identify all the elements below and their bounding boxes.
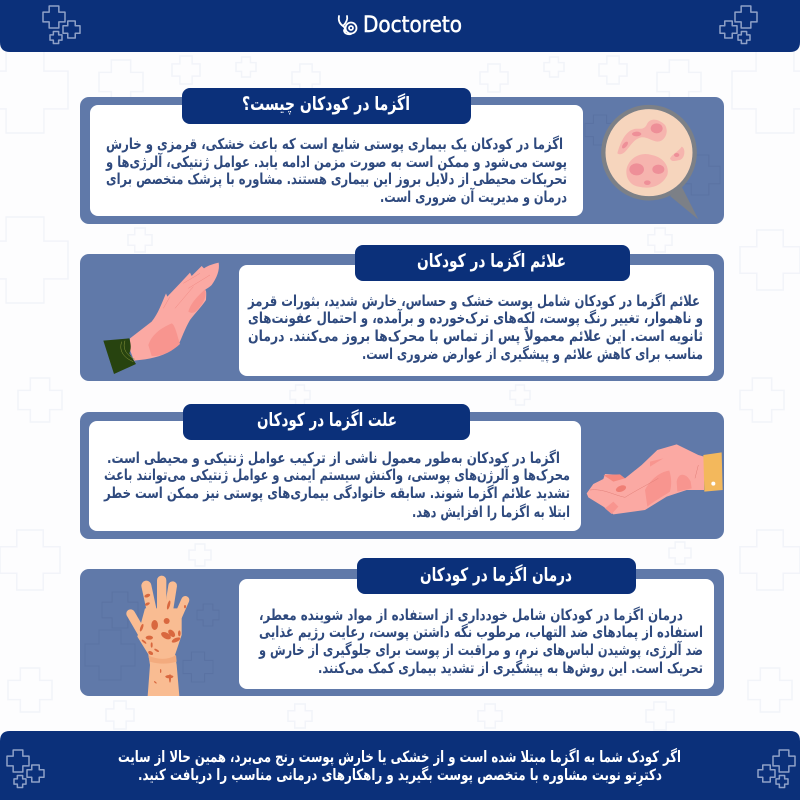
text block: پوست می‌شود و ممکن است به صورت مزمن ادامه یابد. عوامل ژنتیکی، آلرژی‌ها و [105,153,567,172]
text block: تشدید علائم اگزما شوند. سابقه خانوادگی بیماری‌های پوستی نیز ممکن است خطر [103,484,570,503]
text block: درمان اگزما در کودکان شامل خودداری از استفاده از مواد شوینده معطر، [259,606,683,624]
text block: درمان و مدیریت آن ضروری است. [380,188,567,206]
heading pill: درمان اگزما در کودکان [420,564,572,586]
text block: اگزما در کودکان یک بیماری پوستی شایع است که باعث خشکی، قرمزی و خارش [106,135,563,154]
text block [103,449,570,521]
icon: magnifier on skin [603,107,698,219]
footer band [0,731,800,800]
logo text: Doctoreto [363,13,462,38]
footer text [118,747,681,787]
heading pill: علائم اگزما در کودکان [417,250,566,272]
text block: محرک‌ها و آلرژن‌های پوستی، واکنش سیستم ایمنی و عوامل ژنتیکی می‌توانند باعث [104,466,570,485]
text block: ابتلا به اگزما را افزایش دهد. [412,503,570,521]
panel: symptoms [80,245,724,381]
text block: تحریکات محیطی از دلایل بروز این بیماری هستند. مشاوره با پزشک متخصص برای [106,170,567,189]
text block [258,606,703,678]
icon: crosses left [7,750,44,788]
text block: اگزما در کودکان به‌طور معمول ناشی از ترکیب عوامل ژنتیکی و محیطی است. [107,449,560,467]
text block [247,292,703,364]
heading pill [182,88,471,124]
panel: causes [80,404,724,539]
icon: hand with rash [131,580,186,696]
icon: stethoscope [339,16,356,34]
header band [0,0,800,52]
panel: what is eczema [80,88,724,224]
heading pill [183,404,470,440]
icon: crosses right [758,750,795,788]
logo [339,13,462,38]
text block [105,135,567,206]
panel text card [239,265,714,376]
heading pill: علت اگزما در کودکان [257,409,397,431]
panel: treatment [80,558,724,696]
heading pill: اگزما در کودکان چیست؟ [242,93,410,115]
text block: ثانویه است. این علائم معمولاً پس از تماس با محرک‌ها بروز می‌کنند. درمان [248,326,703,346]
heading pill [357,558,636,594]
icon: crosses right [720,6,757,44]
panel text card [239,579,714,689]
icon: raised hand with green cuff [103,263,219,374]
panel text card [89,421,581,531]
panel text card [90,105,583,216]
icon: crosses left [43,6,80,44]
heading pill [355,245,630,281]
icon: cupped hand with yellow cuff [587,444,723,514]
